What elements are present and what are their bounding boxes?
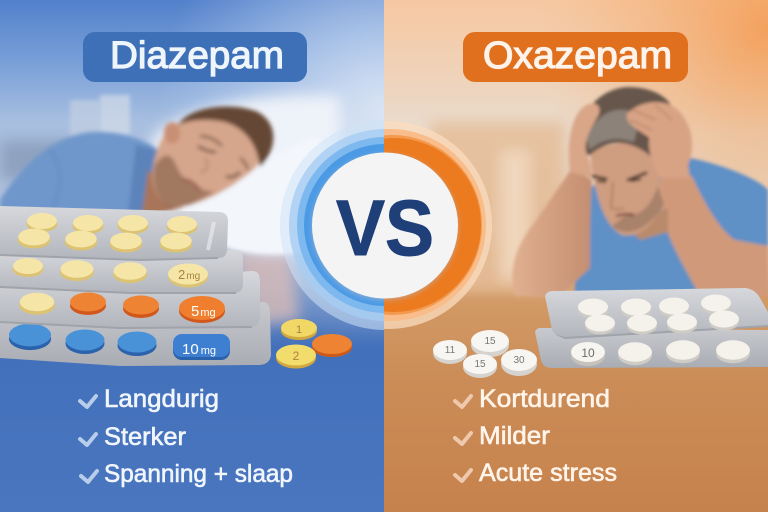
ring: orange half bbox=[384, 121, 492, 329]
pill: 5 mg bbox=[179, 296, 225, 323]
item: Sterker: Sterker bbox=[104, 423, 186, 451]
pill: 15 back: 15 bbox=[484, 336, 496, 347]
blister stack: Diazepam top pack bbox=[0, 206, 228, 261]
ring: blue half bbox=[280, 129, 384, 330]
illustration: sleeping man on pillow bbox=[0, 95, 345, 254]
illustration: stressed man holding head bbox=[512, 87, 768, 296]
brows and eyes bbox=[592, 173, 646, 180]
shirt bbox=[575, 158, 768, 296]
arms bbox=[512, 168, 592, 296]
blister stack: Diazepam 10 mg pack bbox=[0, 302, 271, 366]
pill: 10 mg bbox=[173, 334, 230, 360]
list: Diazepam properties bbox=[80, 385, 293, 488]
pill: 10 mg: 10mg bbox=[182, 341, 216, 358]
item: Milder: Milder bbox=[479, 422, 550, 450]
pill: 30: 30 bbox=[513, 355, 525, 366]
item: Acute stress: Acute stress bbox=[479, 459, 617, 487]
blister: Oxazepam back pack bbox=[545, 288, 768, 339]
pill: orange bbox=[312, 334, 352, 357]
pill: 1: 1 bbox=[296, 324, 302, 336]
heading: Diazepam bbox=[83, 32, 307, 82]
hair bbox=[579, 87, 672, 160]
pill: 10: 10 bbox=[581, 346, 595, 360]
blister stack: Diazepam 5 mg pack bbox=[0, 271, 260, 329]
blister stack: Diazepam 2 mg pack bbox=[0, 250, 243, 294]
VS text: VS bbox=[336, 183, 434, 272]
panel: Diazepam background bbox=[0, 0, 384, 512]
pill: 2: 2 bbox=[293, 349, 300, 363]
neck bbox=[634, 208, 670, 242]
list: Oxazepam properties bbox=[455, 385, 617, 487]
heading: Diazepam: Diazepam bbox=[110, 35, 284, 77]
pill: 15 front: 15 bbox=[474, 359, 486, 370]
item: Kortdurend: Kortdurend bbox=[479, 385, 610, 413]
VS badge bbox=[280, 120, 492, 330]
pill: 10 bbox=[571, 342, 605, 366]
heading: Oxazepam: Oxazepam bbox=[483, 35, 672, 77]
white disc bbox=[312, 154, 458, 300]
item: Spanning + slaap: Spanning + slaap bbox=[104, 460, 293, 488]
pill: 2 mg bbox=[168, 264, 208, 288]
blister: Oxazepam front pack bbox=[535, 328, 768, 368]
loose pills: Diazepam bbox=[276, 319, 352, 368]
pill: 11: 11 bbox=[445, 345, 456, 356]
hands bbox=[569, 103, 600, 178]
pill: 2 mg: 2mg bbox=[178, 267, 200, 282]
face bbox=[590, 142, 664, 235]
item: Langdurig: Langdurig bbox=[104, 385, 219, 413]
pill: 5 mg: 5mg bbox=[191, 303, 216, 320]
heading: Oxazepam bbox=[463, 32, 688, 82]
loose pills: Oxazepam bbox=[433, 330, 537, 378]
panel: Oxazepam background bbox=[384, 0, 768, 512]
